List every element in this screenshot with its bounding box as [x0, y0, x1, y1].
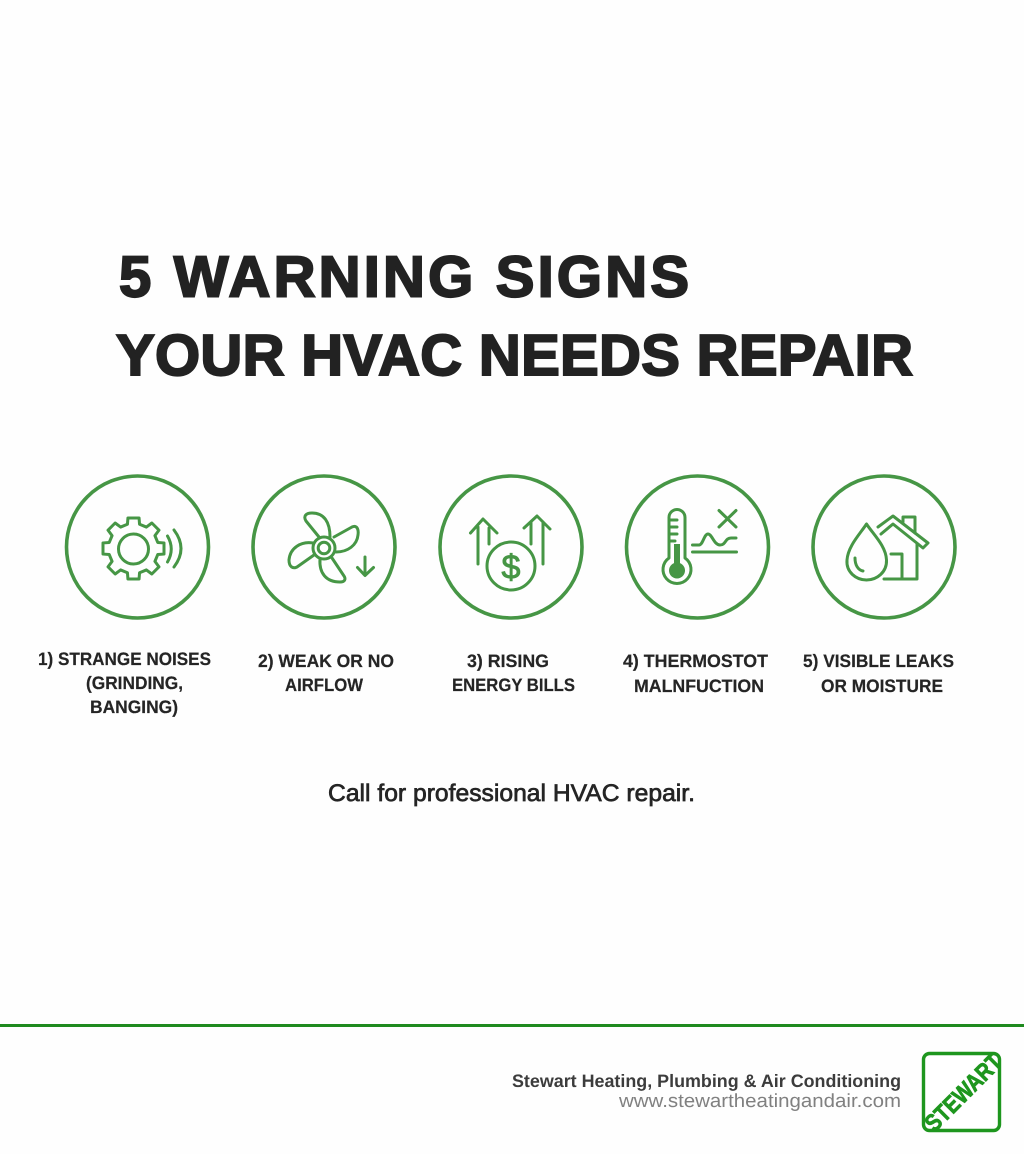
- label: weak airflow: 2) WEAK OR NO: [258, 651, 394, 671]
- icon: water drop and house: [813, 476, 955, 618]
- label: strange noises: [38, 649, 211, 717]
- label: leaks or moisture: [803, 651, 954, 696]
- label: strange noises: BANGING): [90, 697, 178, 717]
- footer company text: [512, 1071, 901, 1112]
- panel: strange noises: [38, 476, 211, 717]
- label: leaks or moisture: OR MOISTURE: [821, 676, 943, 696]
- panel: leaks or moisture: [803, 476, 955, 696]
- panel: thermostat malfunction: [623, 476, 768, 696]
- icon: gear with sound waves: [66, 476, 208, 618]
- icon: fan with down arrow: [253, 476, 395, 618]
- label: thermostat malfunction: [623, 651, 768, 696]
- label: strange noises: 1) STRANGE NOISES: [38, 649, 211, 669]
- logo: Stewart: [922, 1052, 1002, 1132]
- icon: dollar coin with rising arrows: [440, 476, 582, 618]
- label: leaks or moisture: 5) VISIBLE LEAKS: [803, 651, 954, 671]
- title: YOUR HVAC NEEDS REPAIR: [116, 323, 913, 388]
- label: strange noises: (GRINDING,: [86, 673, 183, 693]
- title: 5 WARNING SIGNS: [119, 244, 689, 310]
- label: thermostat malfunction: MALNFUCTION: [634, 676, 764, 696]
- footer company text: www.stewartheatingandair.com: [618, 1091, 901, 1112]
- panel: rising energy bills: [440, 476, 582, 695]
- icon: dollar coin with rising arrows: $: [502, 548, 521, 586]
- icon: thermometer with erratic graph: [626, 476, 768, 618]
- call to action: Call for professional HVAC repair.: [328, 780, 695, 807]
- footer divider: [0, 1024, 1024, 1027]
- panel: weak airflow: [253, 476, 395, 695]
- title: [116, 244, 913, 388]
- label: weak airflow: AIRFLOW: [285, 675, 363, 695]
- logo: Stewart: STEWART: [920, 1048, 1008, 1137]
- label: rising energy bills: 3) RISING: [467, 651, 549, 671]
- footer company text: Stewart Heating, Plumbing & Air Conditioning: [512, 1071, 901, 1091]
- label: weak airflow: [258, 651, 394, 695]
- label: thermostat malfunction: 4) THERMOSTOT: [623, 651, 768, 671]
- label: rising energy bills: [452, 651, 575, 695]
- label: rising energy bills: ENERGY BILLS: [452, 675, 575, 695]
